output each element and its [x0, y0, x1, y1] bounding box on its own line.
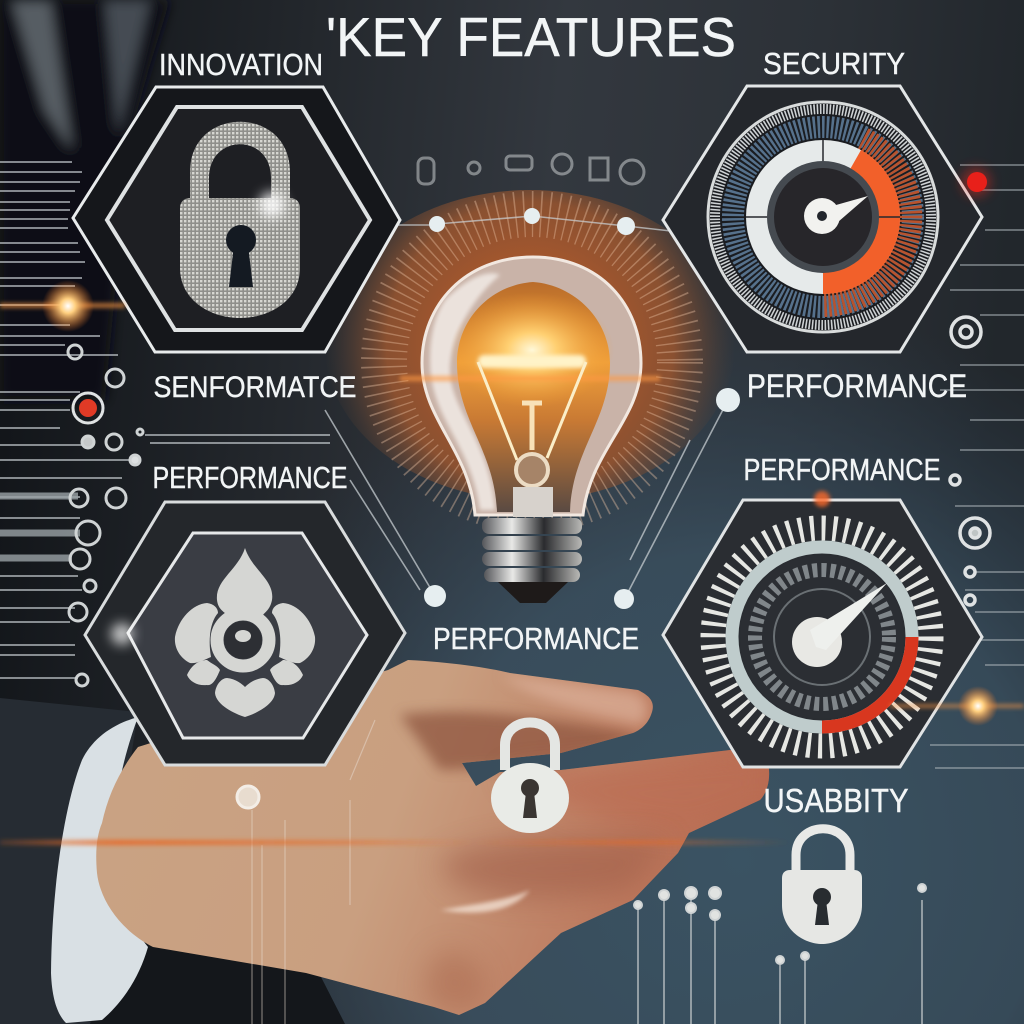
gauge inner dial [732, 547, 912, 727]
knuckle highlight [440, 890, 530, 913]
circle node on hand [237, 786, 259, 808]
shirt cuff and suit sleeve [0, 698, 345, 1024]
top status glyphs [418, 154, 644, 184]
light rays [384, 214, 680, 510]
title: 'KEY FEATURES [326, 6, 736, 68]
panel: innovation lock hexagon [73, 87, 400, 352]
label: innovation: INNOVATION [159, 47, 323, 82]
data lines right [930, 165, 1024, 768]
label: performance right lower: PERFORMANCE [744, 452, 940, 487]
side widgets left [68, 345, 143, 686]
orange horizontal light streak [0, 840, 790, 845]
panel: flower emblem hexagon [85, 502, 405, 765]
label: security: SECURITY [763, 46, 905, 81]
lock icon on hand [491, 722, 569, 833]
small signal pins [634, 884, 926, 1024]
lens flares [0, 280, 1024, 726]
label: performance right upper: PERFORMANCE [747, 368, 967, 404]
data lines left [0, 162, 330, 678]
suit shoulder [0, 0, 170, 400]
horizontal flare [400, 355, 660, 381]
palm shadow [440, 838, 670, 898]
index finger tone [554, 750, 770, 834]
network nodes [424, 208, 740, 609]
sparkle [111, 623, 133, 645]
label: usability: USABBITY [764, 782, 908, 819]
glass highlight [430, 273, 500, 510]
label: performance centre: PERFORMANCE [433, 621, 639, 656]
warm halo behind bulb [325, 190, 735, 500]
filament [478, 362, 586, 460]
lock icon: usability [782, 829, 862, 944]
panel: security gauge hexagon [663, 86, 982, 352]
thumb shading [400, 712, 640, 770]
bulb screw base [482, 518, 582, 603]
connector lines [325, 216, 728, 598]
label: garbled performance left: SENFORMATCE [154, 371, 356, 404]
icon: padlock [180, 122, 300, 318]
thumb highlight [500, 675, 647, 725]
red indicator light [962, 168, 990, 196]
thin vertical lines on hand [252, 720, 375, 1024]
side widgets right [950, 317, 990, 605]
gauge tick ring [713, 528, 931, 746]
icon: flower emblem [175, 548, 315, 717]
bulb neck detail [516, 454, 548, 486]
hand [90, 650, 790, 1024]
panel: speed gauge hexagon [663, 500, 982, 767]
gauge dial [708, 102, 938, 332]
label: performance left lower: PERFORMANCE [152, 460, 348, 495]
thick light bars left [0, 496, 80, 558]
bulb glass [422, 257, 641, 515]
panel: central light bulb [400, 257, 660, 603]
bulb inner glow [457, 282, 610, 512]
